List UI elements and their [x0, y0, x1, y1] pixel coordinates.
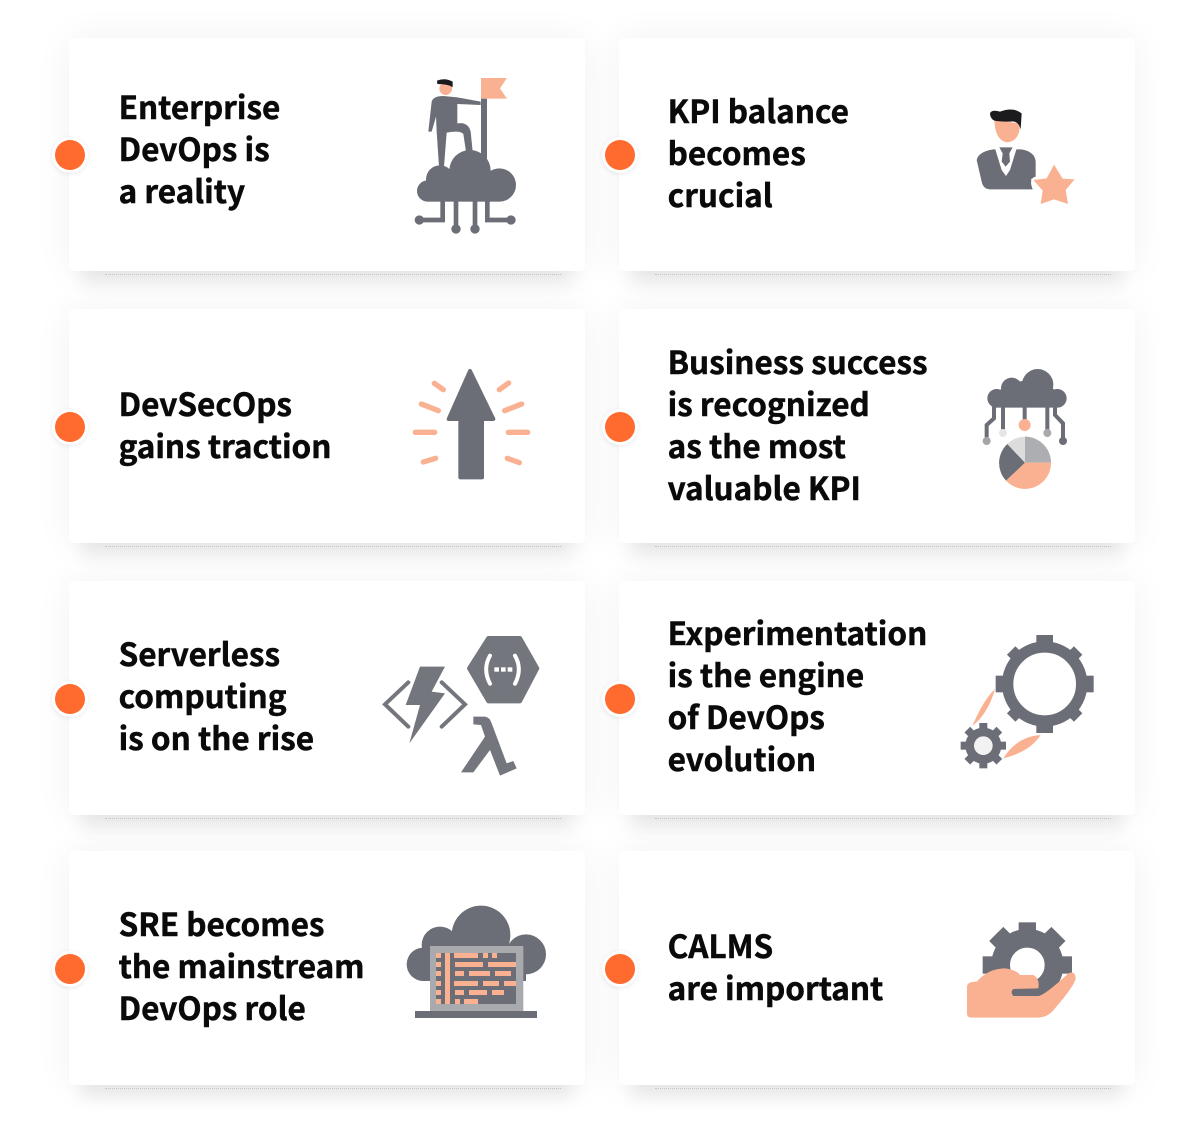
panel: CALMS — [601, 922, 1128, 1100]
panel: Enterprise DevOps — [51, 78, 578, 286]
icon: person with flag on cloud — [414, 78, 516, 234]
heading: Business success is recognized as the most valuable KPI: Business success — [668, 338, 928, 384]
panel: SRE — [51, 900, 578, 1100]
heading: SRE becomes the mainstream DevOps role: SRE becomes — [119, 900, 324, 946]
panel: KPI balance — [601, 87, 1128, 286]
heading: Business success is recognized as the most valuable KPI — [668, 338, 928, 510]
heading: SRE becomes the mainstream DevOps role: the mainstream — [119, 942, 365, 988]
marker dot — [602, 950, 638, 986]
heading: CALMS are important: CALMS — [668, 922, 773, 968]
heading: Enterprise DevOps is a reality: a reality — [119, 167, 245, 213]
heading: Enterprise DevOps is a reality: DevOps is — [119, 125, 270, 171]
heading: Experimentation is the engine of DevOps evolution: is the engine — [668, 651, 864, 697]
heading: DevSecOps gains traction: gains traction — [119, 422, 331, 468]
marker dot — [602, 136, 638, 172]
heading: Enterprise DevOps is a reality: Enterprise — [119, 83, 280, 129]
icon: two gears — [960, 635, 1094, 768]
heading: Business success is recognized as the most valuable KPI: valuable KPI — [668, 464, 861, 510]
heading: DevSecOps gains traction — [119, 380, 331, 468]
heading: Experimentation is the engine of DevOps evolution: evolution — [668, 735, 816, 781]
heading: SRE becomes the mainstream DevOps role: DevOps role — [119, 984, 306, 1030]
heading: Serverless computing is on the rise — [119, 630, 314, 760]
heading: Experimentation is the engine of DevOps evolution: Experimentation — [668, 609, 927, 655]
heading: Experimentation is the engine of DevOps evolution — [668, 609, 927, 781]
heading: KPI balance becomes crucial: becomes — [668, 129, 806, 175]
heading: Enterprise DevOps is a reality — [119, 83, 280, 213]
heading: Experimentation is the engine of DevOps evolution: of DevOps — [668, 693, 825, 739]
panel: Business success — [601, 338, 1128, 558]
icon: serverless logos — [382, 636, 540, 776]
icon: up arrow with rays — [412, 368, 530, 480]
marker dot — [52, 136, 88, 172]
panel: Experimentation — [601, 609, 1128, 830]
marker dot — [602, 408, 638, 444]
panel: DevSecOps — [51, 368, 578, 558]
heading: DevSecOps gains traction: DevSecOps — [119, 380, 292, 426]
heading: SRE becomes the mainstream DevOps role — [119, 900, 365, 1030]
marker dot — [52, 408, 88, 444]
heading: CALMS are important: are important — [668, 964, 883, 1010]
marker dot — [52, 950, 88, 986]
panel: Serverless — [51, 630, 578, 830]
heading: Serverless computing is on the rise: computing — [119, 672, 287, 718]
heading: KPI balance becomes crucial: crucial — [668, 171, 773, 217]
heading: KPI balance becomes crucial — [668, 87, 849, 217]
heading: Business success is recognized as the most valuable KPI: is recognized — [668, 380, 870, 426]
heading: Serverless computing is on the rise: Serverless — [119, 630, 280, 676]
heading: Business success is recognized as the most valuable KPI: as the most — [668, 422, 846, 468]
icon: cloud with pie chart — [982, 369, 1067, 489]
icon: laptop on cloud — [406, 906, 546, 1018]
heading: CALMS are important — [668, 922, 883, 1010]
icon: businessman with star — [976, 110, 1074, 204]
heading: KPI balance becomes crucial: KPI balance — [668, 87, 849, 133]
heading: Serverless computing is on the rise: is on the rise — [119, 714, 314, 760]
marker dot — [602, 680, 638, 716]
icon: hand holding gear — [967, 922, 1076, 1018]
marker dot — [52, 680, 88, 716]
